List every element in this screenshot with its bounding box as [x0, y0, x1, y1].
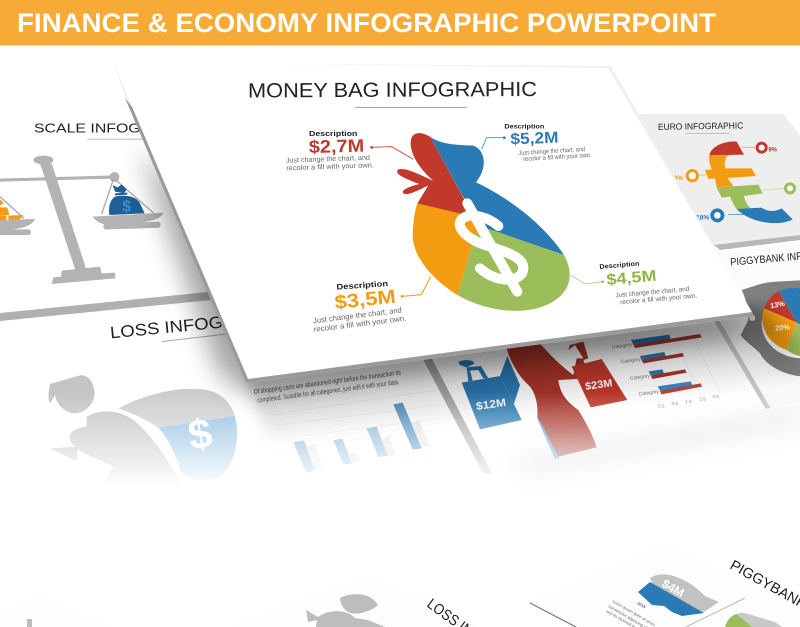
chart: horizontal bars: Category 3 [620, 356, 646, 365]
icon: dollar sign on bag: $ [185, 409, 216, 459]
panel: reflected scale slide [0, 595, 110, 627]
panel: shopping bags slide [423, 334, 720, 474]
divider strip under the euro slide [714, 235, 800, 250]
heading: loss infographic: LOSS INFOG [109, 313, 224, 342]
text: bar chart description: Of shopping carts are abandoned right before the transaction its [253, 370, 402, 396]
callout: red: 9% [768, 147, 778, 153]
panel: loss infographic slide [48, 313, 237, 500]
callout: blue: 18% [696, 214, 709, 221]
euro infographic content [658, 121, 796, 223]
icon: red shopping bag [572, 359, 627, 407]
icon: blue piggy with amount: $4M [660, 576, 687, 600]
chart: horizontal bars: 0.5 [658, 403, 665, 408]
callout: $5,2M: Just change the chart, and [518, 146, 586, 157]
icon: balance scale [0, 156, 163, 284]
callout: $4,5M: Description [599, 261, 640, 271]
divider strip under the scale slide [0, 292, 211, 321]
text: reflected year and description: Lorem ipsum dolor sit amet, [612, 599, 657, 627]
divider strip of the bags slide [423, 358, 492, 474]
callout: $4,5M: Just change the chart, and [615, 286, 690, 299]
callout: $2,7M [286, 129, 413, 172]
bottom fade over the background slides [0, 392, 800, 530]
chart: horizontal bars: 1.5 [685, 399, 692, 404]
icon: red figure silhouette [507, 342, 597, 457]
chart: column chart with fading bars [270, 390, 440, 472]
callout: $4,5M: $4,5M [606, 268, 657, 289]
shadow of the main slide [140, 150, 800, 445]
heading: euro infographic: EURO INFOGRAPHIC [658, 121, 744, 132]
text: bar chart description: completed. Suitable for all categories, just edit it with your data. [257, 379, 400, 405]
callout: $4,5M [571, 261, 698, 306]
chart: horizontal bars: 0.5 [672, 401, 679, 406]
callout: $5,2M: $5,2M [510, 130, 559, 148]
icon: blue money bag: $ [122, 199, 131, 216]
divider strip left of the piggybank slide [713, 319, 771, 408]
callout: orange: 0% [673, 175, 683, 182]
callout: $2,7M: Description [309, 129, 358, 138]
icon: blue figure leg behind [537, 417, 559, 459]
icon: gold bars [0, 199, 23, 220]
callout: $5,2M [482, 124, 592, 163]
icon: pie chart in piggy bank: 13% [769, 299, 786, 310]
panel: scale infographic slide [0, 120, 163, 284]
callout: $2,7M: recolor a fill with your own. [286, 162, 374, 172]
icon: segmented euro symbol [705, 142, 793, 223]
icon: blue piggy with amount [638, 576, 704, 616]
soft grey band below the bags slide [510, 408, 800, 472]
callout: $2,7M: Just change the chart, and [286, 155, 370, 165]
icon: blue shopping bag: $12M [475, 397, 507, 413]
icon: reflected person [306, 594, 385, 627]
icon: dollar sign [460, 203, 523, 292]
icon: pie chart in piggy bank [762, 288, 800, 358]
icon: money bag blue fill [158, 416, 237, 480]
callout: $3,5M: Just change the chart, and [312, 305, 402, 325]
icon: red shopping bag: $23M [584, 377, 613, 393]
bag segment: green [457, 228, 570, 311]
icon: reflected green piggy [725, 613, 782, 627]
chart: horizontal bars: Category 2 [629, 373, 655, 382]
icon: grey piggy [650, 574, 719, 612]
heading: money bag infographic: MONEY BAG INFOGRAPHIC [248, 78, 537, 102]
icon: blue shopping bag [458, 356, 522, 429]
slide edge [113, 63, 754, 383]
icon: blue money bag [109, 185, 145, 216]
panel: euro infographic slide [620, 114, 800, 247]
heading: scale infographic: SCALE INFOG [34, 120, 141, 135]
panel: main money bag slide [113, 62, 754, 383]
callout: $5,2M: recolor a fill with your own. [523, 152, 592, 163]
chart: horizontal bars: 2.5 [699, 397, 706, 402]
callout: $3,5M [312, 277, 431, 334]
icon: pie chart in piggy bank: 20% [775, 322, 791, 333]
callout: $4,5M: recolor a fill with your own. [620, 293, 698, 306]
callout: $3,5M: $3,5M [334, 287, 397, 314]
panel: reflected piggybank slide [530, 545, 800, 627]
icon: money bag grey top [118, 389, 235, 428]
header title: FINANCE & ECONOMY INFOGRAPHIC POWERPOINT [17, 8, 716, 38]
chart: horizontal bars: 3.5 [712, 394, 719, 399]
callout: $5,2M: Description [504, 124, 544, 131]
header banner [0, 0, 800, 46]
callout: green [763, 182, 796, 194]
panel: piggybank infographic slide [713, 243, 800, 408]
panel: reflected loss slide [230, 575, 482, 627]
icon: person carrying bag [48, 375, 190, 500]
text: reflected year and description: 2015 [636, 601, 647, 610]
callout: $3,5M: recolor a fill with your own. [313, 314, 407, 334]
text: bar chart description [253, 370, 402, 405]
callout: $3,5M: Description [336, 279, 388, 292]
chart: horizontal bars [611, 334, 720, 408]
callout: $2,7M: $2,7M [309, 136, 364, 157]
bag segment: orange [413, 203, 478, 295]
panel: bar chart slide [253, 370, 440, 472]
chart: horizontal bars: Category 4 [611, 341, 637, 351]
bag segment: blue [430, 137, 564, 255]
illustration: money bag [397, 133, 570, 311]
icon: grey piggy bank [741, 280, 800, 377]
bag segment: red [397, 133, 473, 217]
chart: horizontal bars: Category 1 [638, 388, 664, 398]
